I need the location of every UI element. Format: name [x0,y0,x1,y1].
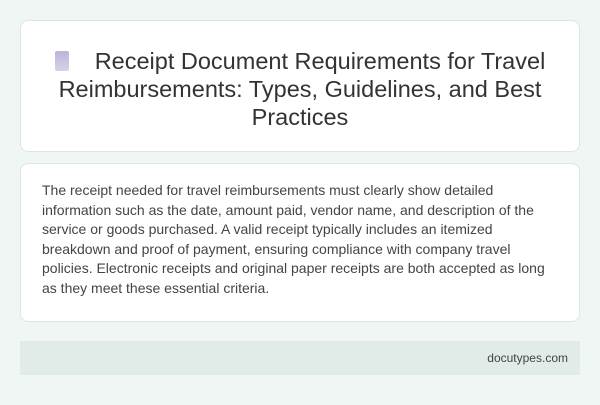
title: Receipt Document Requirements for Travel Reimbursements: Types, Guidelines, and Best Practices [59,48,545,130]
panel: title card [20,20,580,152]
footer text: docutypes.com [487,351,568,365]
panel: description [20,163,580,322]
icon: receipt [55,51,69,71]
footer [20,341,580,375]
text block: The receipt needed for travel reimbursements must clearly show detailed information such as the date, amount paid, vendor name, and description of the service or goods purchased. A valid receipt typically includes an itemized breakdown and proof of payment, ensuring compliance with company travel policies. Electronic receipts and original paper receipts are both accepted as long as they meet these essential criteria. [42,182,545,296]
